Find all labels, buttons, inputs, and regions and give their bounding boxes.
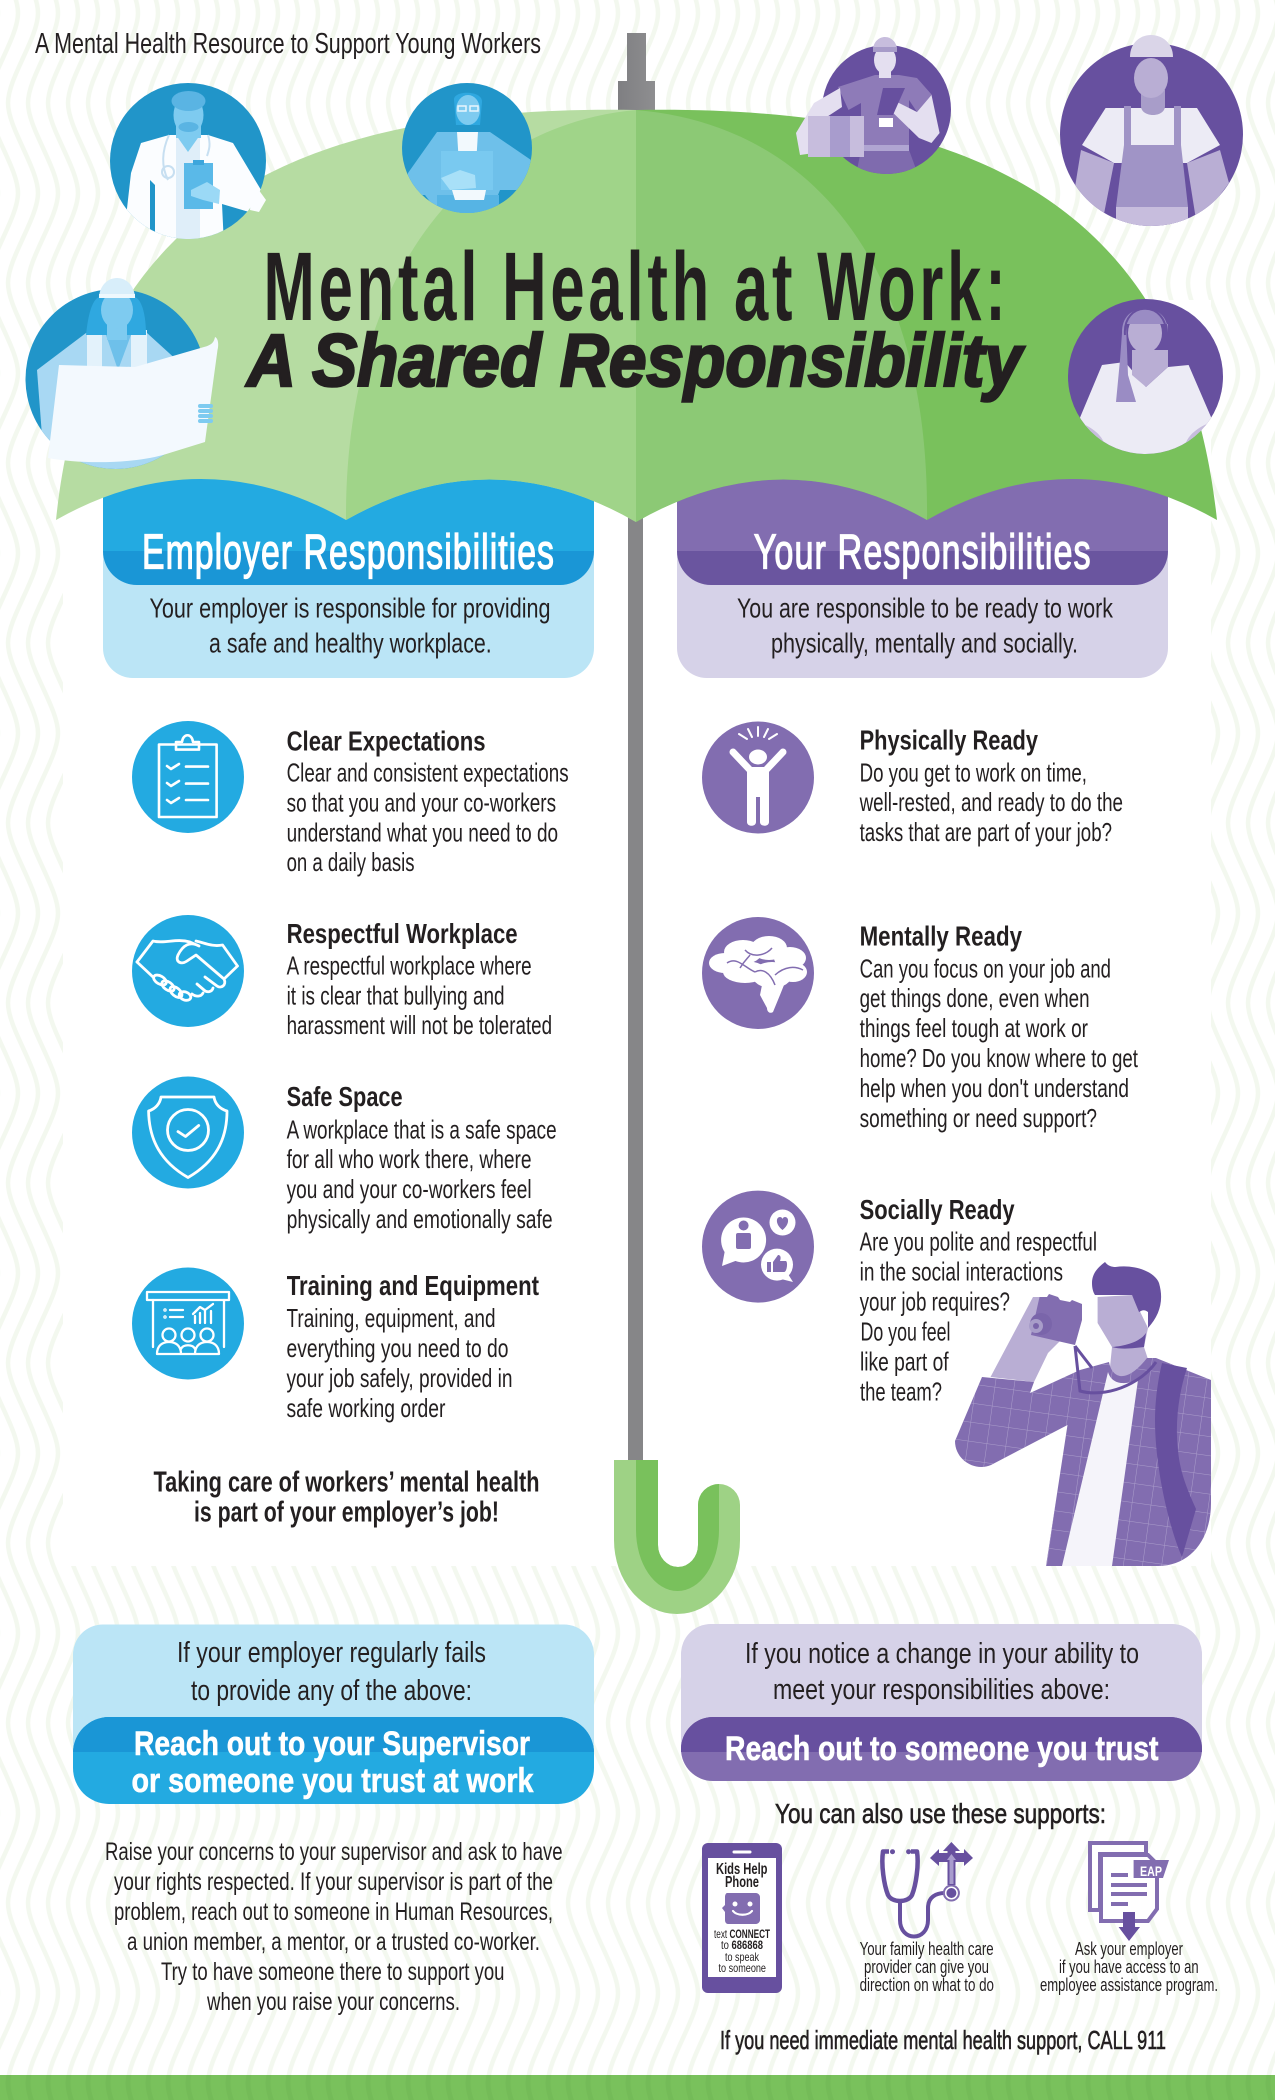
support: employee assistance program: if you have access to an [1059, 1957, 1199, 1977]
callout: reach out to supervisor: or someone you trust at work [132, 1762, 534, 1800]
umbrella canopy [56, 110, 1217, 522]
callout: reach out to someone you trust: Reach out to someone you trust [725, 1730, 1158, 1768]
item: safe space: physically and emotionally safe [287, 1204, 553, 1234]
illustration: engineer with plan [26, 278, 218, 475]
umbrella handle [614, 1460, 740, 1614]
item: clear expectations: Clear and consistent expectations [287, 758, 569, 788]
support: family health care provider: Your family health care [860, 1939, 994, 1959]
panel: if your employer fails [73, 1624, 594, 1804]
icon: EAP documents: EAP [1140, 1863, 1162, 1879]
item: socially ready: the team? [860, 1376, 942, 1406]
panel: if you notice a change: meet your responsibilities above: [773, 1674, 1110, 1706]
your responsibilities header text: physically, mentally and socially. [771, 628, 1078, 659]
item: safe space: Safe Space [287, 1081, 403, 1112]
item: mentally ready: home? Do you know where to get [860, 1043, 1139, 1073]
item: mentally ready [702, 917, 1139, 1133]
item: clear expectations: so that you and your co-workers [287, 788, 556, 818]
item: clear expectations [132, 721, 569, 877]
icon: kids help phone: to someone [718, 1961, 766, 1975]
item: mentally ready: things feel tough at work or [860, 1013, 1088, 1043]
icon: kids help phone: to speak [725, 1950, 760, 1964]
item: socially ready: Are you polite and respectful [860, 1226, 1097, 1256]
icon: brain [702, 917, 814, 1029]
callout: reach out to someone you trust [681, 1717, 1202, 1781]
text block: raise your concerns: Raise your concerns to your supervisor and ask to have [105, 1838, 563, 1866]
icon: kids help phone: Kids Help [716, 1861, 768, 1878]
item: clear expectations: on a daily basis [287, 847, 415, 877]
employer closing statement: is part of your employer’s job! [194, 1497, 499, 1529]
callout: reach out to supervisor: Reach out to your Supervisor [134, 1725, 530, 1763]
panel: your responsibilities header [677, 470, 1168, 678]
item: respectful workplace: Respectful Workplace [287, 918, 518, 949]
support: family health care provider: direction on what to do [860, 1975, 994, 1995]
text block: raise your concerns [105, 1838, 563, 2016]
heading: supports: You can also use these supports: [775, 1798, 1106, 1829]
icon: kids help phone: to 686868 [721, 1938, 763, 1952]
icon: shield [132, 1076, 244, 1188]
employer header text: a safe and healthy workplace. [209, 628, 492, 659]
illustration: doctor [110, 83, 270, 245]
item: physically ready: Do you get to work on time, [860, 757, 1087, 787]
item: socially ready [702, 1191, 1097, 1406]
item: training and equipment: everything you need to do [286, 1333, 508, 1363]
item: training and equipment: safe working order [286, 1393, 446, 1423]
item: training and equipment: your job safely, provided in [286, 1363, 512, 1393]
icon: person with raised arms [702, 722, 814, 834]
text block: raise your concerns: a union member, a mentor, or a trusted co-worker. [127, 1928, 540, 1956]
callout: reach out to supervisor [73, 1717, 594, 1804]
employer header text [142, 526, 555, 659]
item: physically ready [702, 722, 1123, 847]
illustration: man with camera [955, 1262, 1211, 1566]
item: safe space: you and your co-workers feel [287, 1174, 532, 1204]
item: clear expectations: Clear Expectations [287, 726, 486, 756]
title [245, 232, 1026, 402]
icon: training board [132, 1268, 244, 1380]
icon: kids help phone [702, 1843, 782, 1993]
support: family health care provider: provider can give you [864, 1957, 989, 1977]
support: employee assistance program: Ask your employer [1075, 1939, 1183, 1959]
item: mentally ready: Mentally Ready [860, 920, 1022, 952]
item: socially ready: in the social interactions [860, 1256, 1063, 1286]
support: family health care provider [860, 1842, 994, 1995]
icon: handshake [132, 915, 244, 1027]
icon: kids help phone: text CONNECT [714, 1927, 770, 1941]
employer header text: Employer Responsibilities [142, 526, 555, 580]
icon: clipboard [132, 721, 244, 833]
camera man's shirt [955, 1358, 1211, 1566]
panel: if you notice a change: If you notice a change in your ability to [745, 1638, 1139, 1670]
item: mentally ready: Can you focus on your job and [860, 954, 1111, 984]
item: socially ready: Do you feel [860, 1316, 950, 1346]
text block: raise your concerns: when you raise your concerns. [206, 1988, 460, 2016]
your responsibilities header text: Your Responsibilities [754, 526, 1092, 580]
item: socially ready: your job requires? [860, 1286, 1010, 1316]
employer closing statement: Taking care of workers’ mental health [154, 1467, 540, 1499]
footer band [0, 2075, 1275, 2100]
text block: raise your concerns: your rights respected. If your supervisor is part of the [114, 1868, 553, 1896]
panel: if you notice a change [681, 1624, 1202, 1781]
employer header text: Your employer is responsible for providing [150, 593, 550, 624]
item: safe space: for all who work there, where [287, 1144, 532, 1174]
title: A Shared Responsibility [245, 319, 1026, 402]
illustration: woman with book [402, 83, 532, 215]
illustration: delivery worker [796, 37, 951, 180]
icon: stethoscope and arrows [882, 1842, 973, 1936]
your responsibilities header text: You are responsible to be ready to work [737, 593, 1113, 624]
item: mentally ready: get things done, even when [860, 983, 1090, 1013]
item: respectful workplace: A respectful workplace where [287, 951, 532, 981]
item: respectful workplace [132, 915, 552, 1040]
item: clear expectations: understand what you need to do [287, 817, 558, 847]
employer closing statement [154, 1467, 540, 1529]
item: mentally ready: help when you don't understand [860, 1073, 1129, 1103]
panel: if your employer fails: If your employer regularly fails [177, 1637, 486, 1669]
item: respectful workplace: it is clear that bullying and [287, 980, 505, 1010]
item: safe space: A workplace that is a safe space [287, 1114, 557, 1144]
icon: EAP documents [1090, 1843, 1169, 1941]
illustration: worker in overalls [1060, 35, 1243, 230]
item: socially ready: Socially Ready [860, 1194, 1015, 1225]
support: employee assistance program [1040, 1843, 1218, 1995]
icon: social bubbles [702, 1191, 814, 1303]
item: respectful workplace: harassment will not be tolerated [287, 1010, 552, 1040]
icon: kids help phone: Phone [725, 1874, 759, 1891]
umbrella shaft [628, 100, 643, 1465]
text block: raise your concerns: Try to have someone there to support you [161, 1958, 504, 1986]
item: physically ready: well-rested, and ready to do the [859, 787, 1123, 817]
umbrella tip [618, 33, 655, 112]
your responsibilities header text [737, 526, 1113, 659]
panel: employer responsibilities header [103, 470, 594, 678]
top tagline: A Mental Health Resource to Support Young Workers [35, 28, 541, 60]
item: physically ready: tasks that are part of your job? [860, 817, 1112, 847]
item: safe space [132, 1076, 557, 1234]
panel: if your employer fails: to provide any of the above: [191, 1675, 472, 1707]
text block: raise your concerns: problem, reach out to someone in Human Resources, [114, 1898, 553, 1926]
illustration: worker with headset [1068, 299, 1223, 460]
item: training and equipment [132, 1268, 539, 1423]
item: physically ready: Physically Ready [860, 724, 1038, 755]
item: socially ready: like part of [860, 1346, 949, 1376]
item: mentally ready: something or need support? [860, 1103, 1097, 1133]
item: training and equipment: Training, equipment, and [286, 1303, 496, 1333]
item: training and equipment: Training and Equipment [287, 1270, 539, 1301]
